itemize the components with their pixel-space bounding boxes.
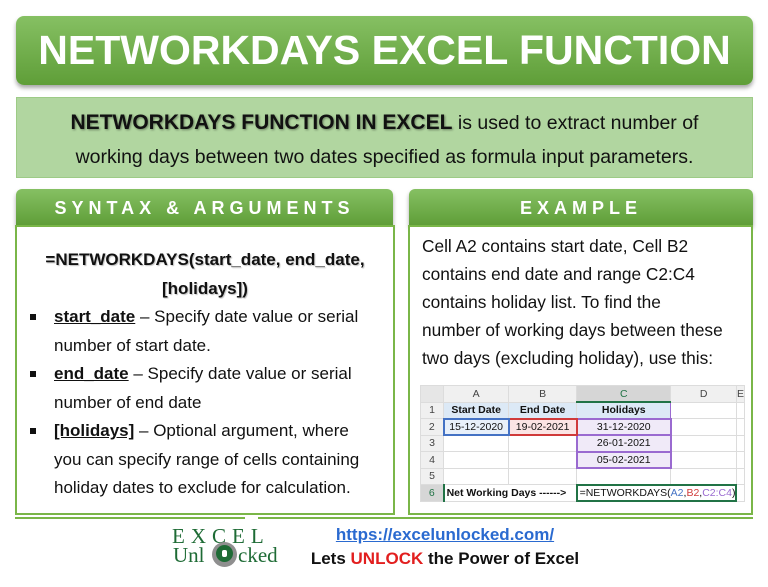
footer text: url and tagline bbox=[311, 525, 579, 568]
description box bbox=[16, 97, 753, 178]
spreadsheet: 15-12-2020 bbox=[449, 421, 503, 433]
spreadsheet: D bbox=[700, 388, 708, 400]
spreadsheet: Start Date bbox=[451, 404, 501, 416]
example text bbox=[422, 236, 723, 368]
spreadsheet: =NETWORKDAYS(A2,B2,C2:C4) bbox=[580, 487, 735, 499]
bullet: holidays: holiday dates to exclude for calculation. bbox=[54, 478, 351, 497]
title bbox=[16, 16, 753, 85]
header: syntax & arguments bbox=[16, 189, 393, 225]
spreadsheet: 5 bbox=[429, 470, 435, 482]
footer divider bbox=[15, 517, 245, 519]
spreadsheet: A bbox=[473, 388, 480, 400]
bullet: holidays: you can specify range of cells containing bbox=[54, 450, 359, 468]
logo: excel unlocked bbox=[172, 524, 278, 567]
spreadsheet: 4 bbox=[429, 454, 435, 466]
spreadsheet bbox=[420, 385, 745, 502]
header: syntax & arguments: SYNTAX & ARGUMENTS bbox=[54, 198, 354, 218]
syntax formula bbox=[45, 250, 365, 299]
description box: working days between two dates specified as formula input parameters. bbox=[76, 146, 693, 168]
spreadsheet: B bbox=[539, 388, 546, 400]
spreadsheet: End Date bbox=[520, 404, 565, 416]
spreadsheet: Net Working Days ------> bbox=[447, 487, 566, 499]
panel: example bbox=[408, 225, 753, 515]
footer text: url and tagline: https://excelunlocked.com/ bbox=[336, 525, 554, 544]
example text: number of working days between these bbox=[422, 320, 723, 340]
bullet: end_date bbox=[30, 364, 352, 412]
spreadsheet: 6 bbox=[429, 487, 435, 499]
example text: contains holiday list. To find the bbox=[422, 292, 661, 312]
syntax formula: =NETWORKDAYS(start_date, end_date, bbox=[45, 250, 365, 269]
spreadsheet: 2 bbox=[429, 421, 435, 433]
spreadsheet: E bbox=[737, 388, 744, 400]
icon: lock bbox=[212, 542, 237, 567]
bullet: holidays bbox=[30, 421, 359, 497]
logo: excel unlocked: cked bbox=[238, 543, 278, 567]
bullet: start_date bbox=[30, 307, 358, 354]
bullet: end_date: end_date – Specify date value or serial bbox=[54, 364, 352, 383]
syntax formula: [holidays]) bbox=[162, 279, 248, 298]
spreadsheet: C bbox=[620, 388, 628, 400]
bullet: holidays: [holidays] – Optional argument, where bbox=[54, 421, 349, 440]
header: example bbox=[409, 189, 753, 225]
title: NETWORKDAYS EXCEL FUNCTION bbox=[38, 27, 731, 73]
example text: contains end date and range C2:C4 bbox=[422, 264, 695, 284]
header: example: EXAMPLE bbox=[520, 198, 642, 218]
panel: syntax bbox=[15, 225, 395, 515]
spreadsheet: 1 bbox=[429, 404, 435, 416]
bullet: end_date: number of end date bbox=[54, 392, 201, 412]
spreadsheet: Holidays bbox=[602, 404, 646, 416]
description box: NETWORKDAYS FUNCTION IN EXCEL is used to extract number of bbox=[71, 111, 698, 134]
logo: excel unlocked: Unl bbox=[173, 543, 204, 567]
spreadsheet: 26-01-2021 bbox=[597, 437, 651, 449]
spreadsheet: 19-02-2021 bbox=[516, 421, 570, 433]
footer text: url and tagline: Lets UNLOCK the Power of Excel bbox=[311, 549, 579, 568]
spreadsheet: 05-02-2021 bbox=[597, 454, 651, 466]
example text: two days (excluding holiday), use this: bbox=[422, 348, 713, 368]
spreadsheet: 3 bbox=[429, 437, 435, 449]
bullet: start_date: start_date – Specify date value or serial bbox=[54, 307, 358, 326]
spreadsheet: 31-12-2020 bbox=[597, 421, 651, 433]
bullet: start_date: number of start date. bbox=[54, 336, 211, 354]
logo: excel unlocked: EXCEL bbox=[172, 524, 270, 548]
example text: Cell A2 contains start date, Cell B2 bbox=[422, 236, 688, 256]
